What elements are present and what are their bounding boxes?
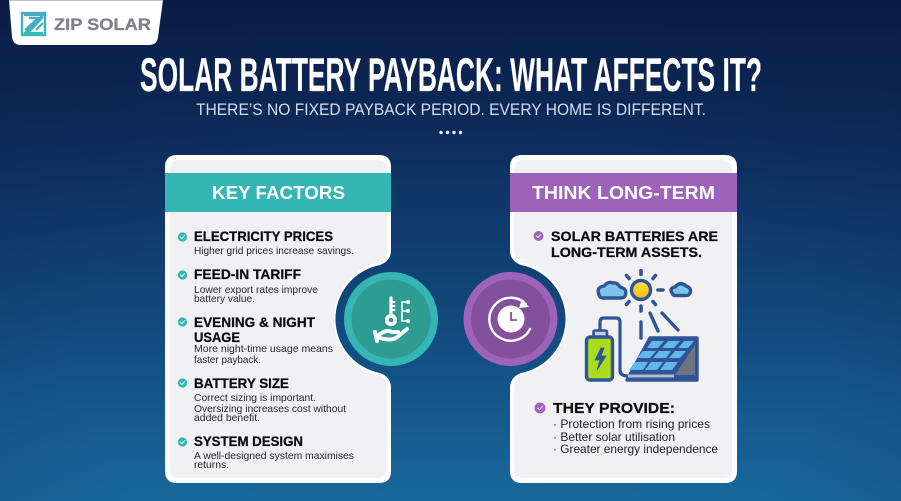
factor: battery size: BATTERY SIZE bbox=[194, 376, 289, 391]
factor: evening and night usage: faster payback. bbox=[194, 355, 261, 366]
statement: long-term assets bbox=[534, 229, 718, 260]
list: they provide: · Greater energy independence bbox=[553, 443, 718, 456]
subtitle: THERE’S NO FIXED PAYBACK PERIOD. EVERY HOME IS DIFFERENT. bbox=[196, 101, 706, 119]
list: they provide: · Better solar utilisation bbox=[553, 431, 675, 444]
factor: battery size: Oversizing increases cost without bbox=[194, 404, 346, 415]
factor: evening and night usage: More night-time usage means bbox=[194, 344, 333, 355]
panel: think long-term bbox=[510, 155, 737, 483]
factor: system design: returns. bbox=[194, 460, 229, 471]
dots divider bbox=[439, 131, 462, 134]
factor: evening and night usage: USAGE bbox=[194, 330, 240, 345]
statement: long-term assets: LONG-TERM ASSETS. bbox=[551, 245, 702, 260]
factor: feed-in tariff: battery value. bbox=[194, 294, 255, 305]
factor: battery size bbox=[178, 376, 346, 424]
logo wordmark: ZIP SOLAR bbox=[54, 15, 151, 34]
list: they provide bbox=[534, 400, 718, 456]
factor: system design: SYSTEM DESIGN bbox=[194, 434, 303, 449]
list: they provide: · Protection from rising prices bbox=[553, 418, 710, 431]
panel: key factors bbox=[165, 155, 391, 483]
icon badge: clock with arrow bbox=[464, 272, 558, 366]
factor: feed-in tariff: FEED-IN TARIFF bbox=[194, 267, 301, 282]
factor: evening and night usage bbox=[178, 315, 333, 366]
statement: long-term assets: SOLAR BATTERIES ARE bbox=[551, 229, 718, 244]
icon: sun, clouds, battery and solar panel bbox=[586, 270, 697, 380]
factor: electricity prices: Higher grid prices increase savings. bbox=[194, 246, 354, 257]
header: think long-term: THINK LONG-TERM bbox=[532, 182, 715, 203]
header: think long-term bbox=[510, 173, 737, 212]
logo mark bbox=[22, 13, 45, 35]
icon badge: key and hand bbox=[344, 272, 438, 366]
list: they provide: THEY PROVIDE: bbox=[553, 400, 675, 417]
factor: battery size: added benefit. bbox=[194, 413, 260, 424]
factor: electricity prices bbox=[178, 229, 354, 257]
factor: feed-in tariff: Lower export rates improve bbox=[194, 285, 318, 296]
factor: system design bbox=[178, 434, 354, 471]
header: key factors: KEY FACTORS bbox=[212, 182, 345, 203]
factor: system design: A well-designed system maximises bbox=[194, 451, 354, 462]
header: key factors bbox=[165, 173, 391, 212]
factor: evening and night usage: EVENING & NIGHT bbox=[194, 315, 316, 330]
factor: feed-in tariff bbox=[178, 267, 318, 305]
logo badge bbox=[9, 0, 163, 45]
factor: battery size: Correct sizing is important. bbox=[194, 393, 316, 404]
factor: electricity prices: ELECTRICITY PRICES bbox=[194, 229, 333, 244]
